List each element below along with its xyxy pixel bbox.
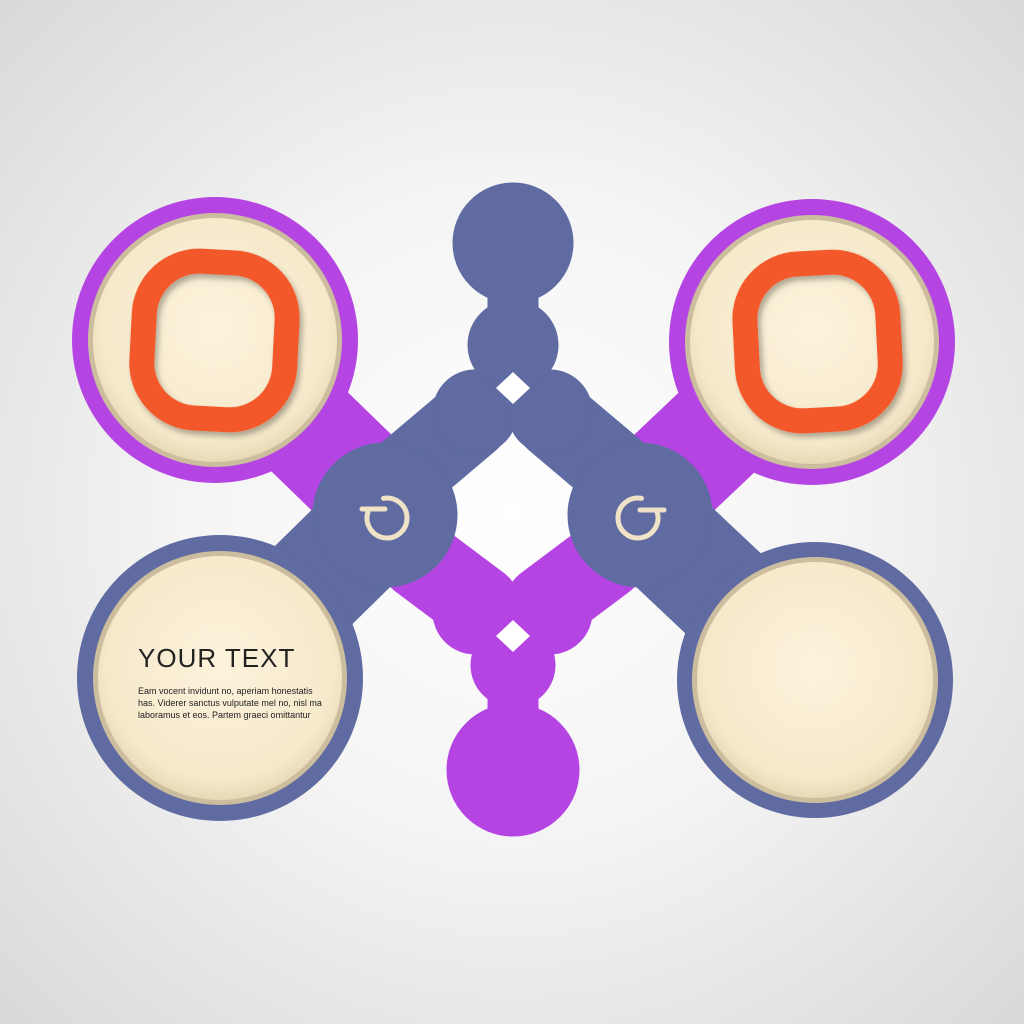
circle: bottom-left: [77, 535, 363, 821]
text block: Eam vocent invidunt no, aperiam honestatis: [138, 686, 313, 696]
center diamond gaps: [496, 372, 530, 652]
circle: bottom-right: [677, 542, 953, 818]
text block: laboramus et eos. Partem graeci omittantur: [138, 710, 311, 720]
text block: [138, 686, 322, 720]
purple connectors: [215, 340, 812, 836]
icon: orange ring top-right: [742, 259, 893, 424]
icon: orange ring top-left: [139, 258, 290, 423]
left hub: [313, 443, 457, 587]
circle: top-left: [72, 197, 358, 483]
text block: has. Viderer sanctus vulputate mel no, nisl ma: [138, 698, 322, 708]
blue connectors: [220, 183, 815, 680]
circle: top-right: [669, 199, 955, 485]
icon: power right: [618, 498, 664, 538]
right hub: [568, 443, 712, 587]
heading: your text: YOUR TEXT: [138, 643, 295, 673]
icon: power left: [362, 498, 407, 538]
